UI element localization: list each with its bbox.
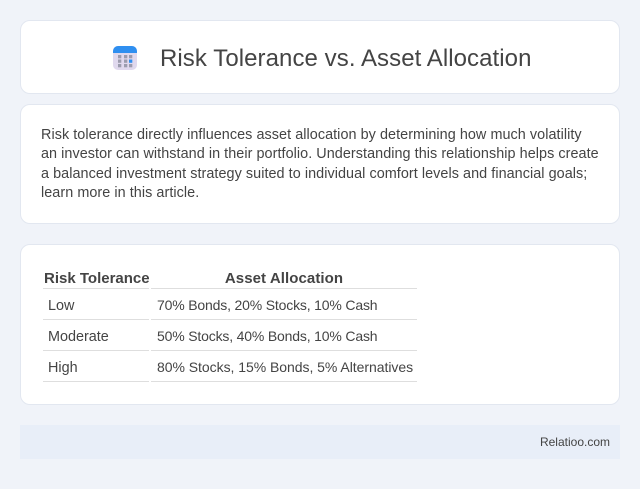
description text: learn more in this article. (41, 185, 199, 201)
panel: table (20, 244, 620, 405)
row: moderate: Moderate (48, 329, 109, 345)
description text: an investor can withstand in their portfolio. Understanding this relationship helps create (41, 146, 599, 162)
table: risk tolerance vs asset allocation (43, 270, 417, 382)
description text (41, 127, 599, 201)
footer text: Relatioo.com (540, 435, 610, 449)
icon: calendar (113, 46, 137, 70)
description text: a balanced investment strategy suited to individual comfort levels and financial goals; (41, 166, 587, 182)
description text: Risk tolerance directly influences asset allocation by determining how much volatility (41, 127, 582, 143)
footer (20, 425, 620, 459)
allocation: low: 70% Bonds, 20% Stocks, 10% Cash (157, 297, 377, 313)
row: high: High (48, 360, 78, 376)
title text: Risk Tolerance vs. Asset Allocation (160, 45, 532, 72)
allocation: moderate: 50% Stocks, 40% Bonds, 10% Cash (157, 328, 377, 344)
panel: title (20, 20, 620, 94)
panel: description (20, 104, 620, 224)
header: risk tolerance: Risk Tolerance (44, 270, 150, 287)
allocation: high: 80% Stocks, 15% Bonds, 5% Alternatives (157, 359, 413, 375)
row: low: Low (48, 298, 74, 314)
header: asset allocation: Asset Allocation (225, 270, 343, 287)
